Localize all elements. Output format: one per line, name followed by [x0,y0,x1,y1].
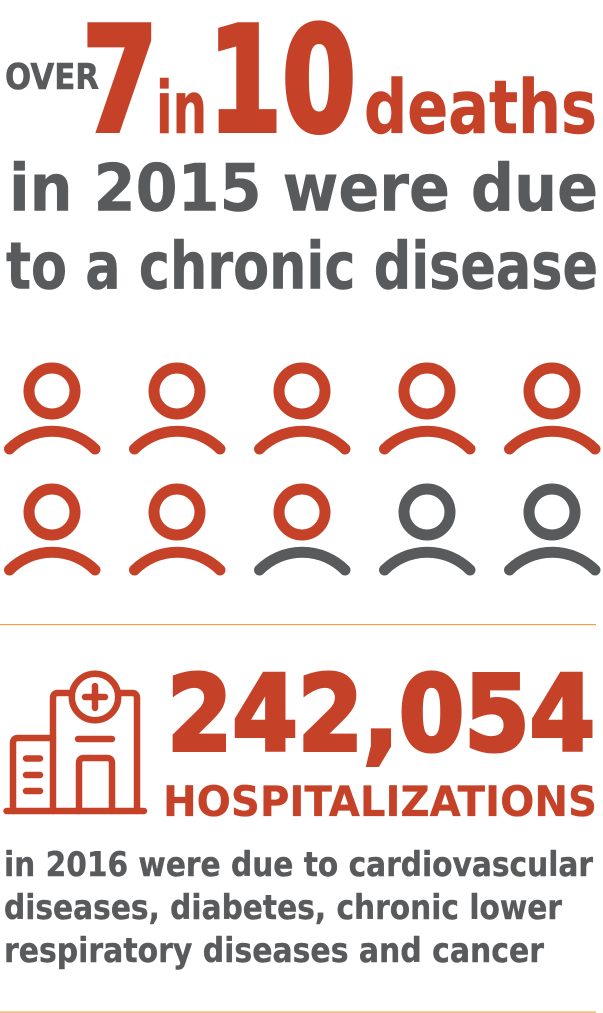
label: hospitalizations: HOSPITALIZATIONS [163,777,597,826]
text block: description [4,845,593,971]
icon: hospital [6,674,144,811]
icon: person 7 [134,489,220,570]
icon: person 10 [510,489,595,570]
title: over 7 in 10 deaths: 7 [82,0,158,166]
icon: person 6 [10,489,95,570]
icon: person 5 [510,368,595,449]
icon: person 8 (red head, grey shoulders) [260,489,345,570]
icon: person 4 [384,368,470,449]
text block: description: respiratory diseases and cancer [4,931,544,971]
pictogram: 7 of 10 people [10,368,595,570]
icon: person 1 [10,368,95,449]
title: over 7 in 10 deaths [5,0,597,166]
icon: person 3 [260,368,345,449]
title: over 7 in 10 deaths: OVER [5,57,99,98]
icon: person 2 [134,368,220,449]
title: over 7 in 10 deaths: in [156,66,207,150]
icon: person 9 [384,489,470,570]
title: over 7 in 10 deaths: 10 [208,0,356,166]
